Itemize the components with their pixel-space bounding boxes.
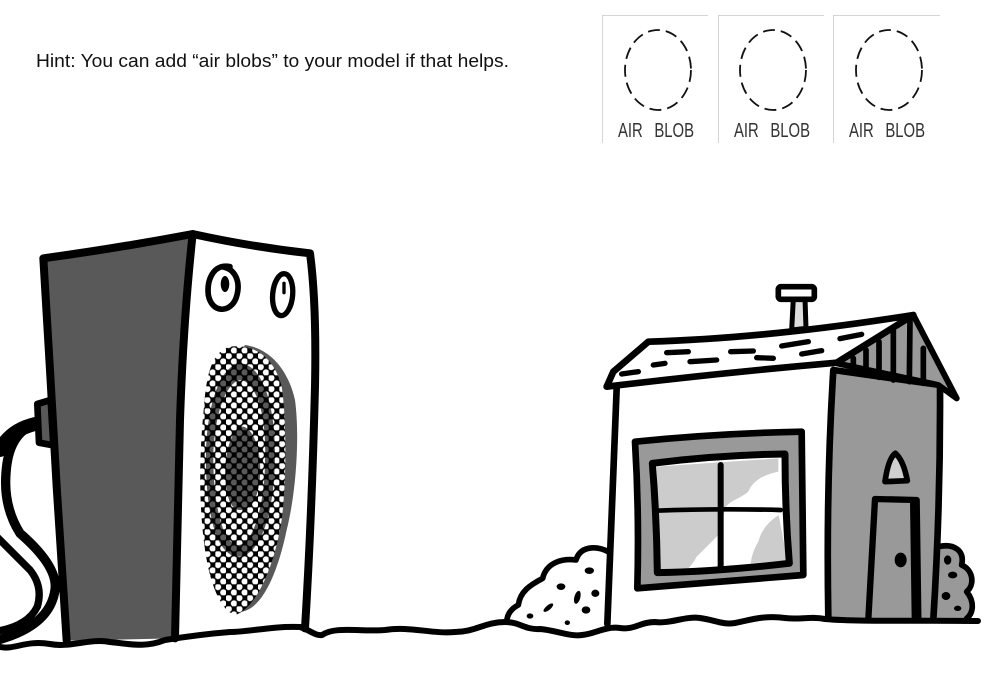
speaker grille (193, 340, 297, 620)
power cord (0, 424, 55, 639)
air blob card 1: AIR BLOB (618, 120, 694, 142)
gable (837, 315, 957, 398)
illustration: fan heater (0, 234, 315, 641)
illustration: house (507, 287, 972, 625)
right bush (933, 546, 972, 620)
chimney (778, 287, 814, 330)
small arched window (885, 453, 907, 482)
right knob (271, 273, 294, 316)
window (635, 432, 803, 588)
heater side face (43, 235, 192, 641)
air blob cards (602, 16, 940, 143)
roof (607, 315, 913, 387)
left bush (507, 548, 608, 625)
door (868, 499, 918, 619)
heater front face (176, 234, 315, 638)
air blob card 1 (602, 16, 708, 143)
front wall (607, 370, 830, 624)
air blob card 2: AIR BLOB (734, 120, 810, 142)
side wall (828, 370, 940, 619)
air blob card 2 (718, 16, 824, 143)
hint text: Hint: You can add “air blobs” to your model if that helps. (36, 51, 509, 71)
ground line (0, 617, 978, 648)
heater outline (43, 234, 315, 641)
air blob card 3: AIR BLOB (849, 120, 925, 142)
air blob card 3 (834, 16, 940, 143)
plug (37, 400, 53, 445)
left knob (208, 266, 238, 309)
